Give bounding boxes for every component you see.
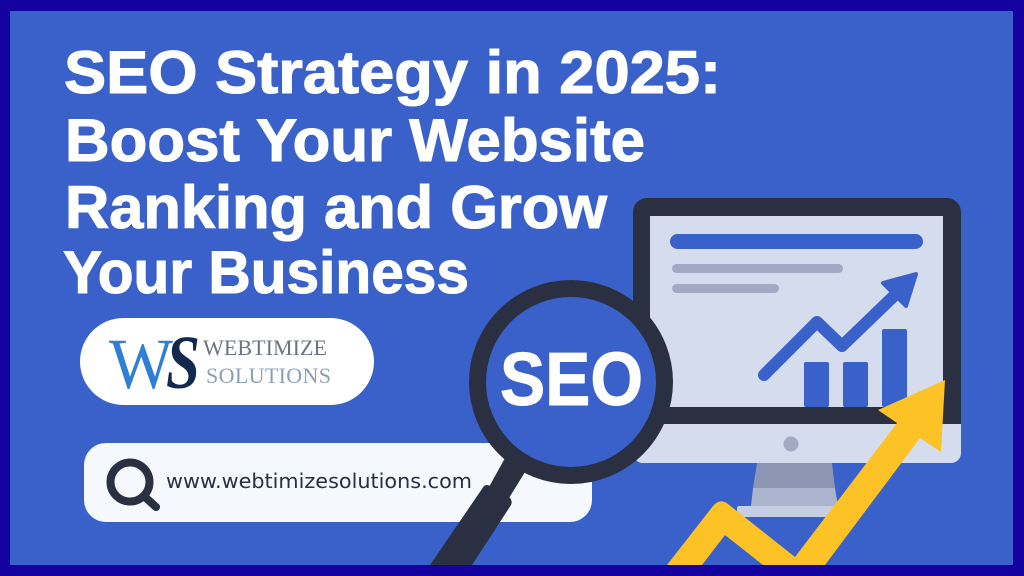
monitor illustration	[633, 198, 961, 517]
magnifying glass	[430, 288, 664, 565]
screen text lines	[672, 264, 843, 293]
logo wordmark	[203, 335, 331, 388]
title: Your Business	[63, 239, 469, 306]
icon: search magnifier	[110, 462, 156, 507]
title: SEO Strategy in 2025:	[64, 39, 721, 106]
power button	[784, 436, 798, 452]
title: Ranking and Grow	[65, 174, 607, 241]
magnifier lens	[478, 288, 664, 476]
monitor chin	[633, 424, 961, 463]
logo wordmark: WEBTIMIZE	[203, 335, 327, 360]
website url: www.webtimizesolutions.com	[166, 469, 472, 493]
title	[63, 39, 721, 306]
trend arrow on screen	[764, 274, 916, 375]
logo pill	[80, 318, 374, 405]
screen heading bar	[670, 234, 923, 249]
monitor screen	[650, 216, 943, 407]
search bar	[84, 443, 592, 522]
monitor body	[633, 198, 961, 424]
yellow growth arrow	[667, 380, 945, 565]
bar chart	[804, 329, 907, 407]
logo mark: WS monogram: S	[166, 321, 200, 405]
monitor stand	[737, 463, 842, 517]
lens label: SEO	[500, 337, 643, 421]
title: Boost Your Website	[65, 107, 645, 174]
logo wordmark: SOLUTIONS	[206, 363, 331, 388]
logo mark: WS monogram: W	[109, 324, 173, 404]
magnifier handle	[430, 458, 525, 565]
